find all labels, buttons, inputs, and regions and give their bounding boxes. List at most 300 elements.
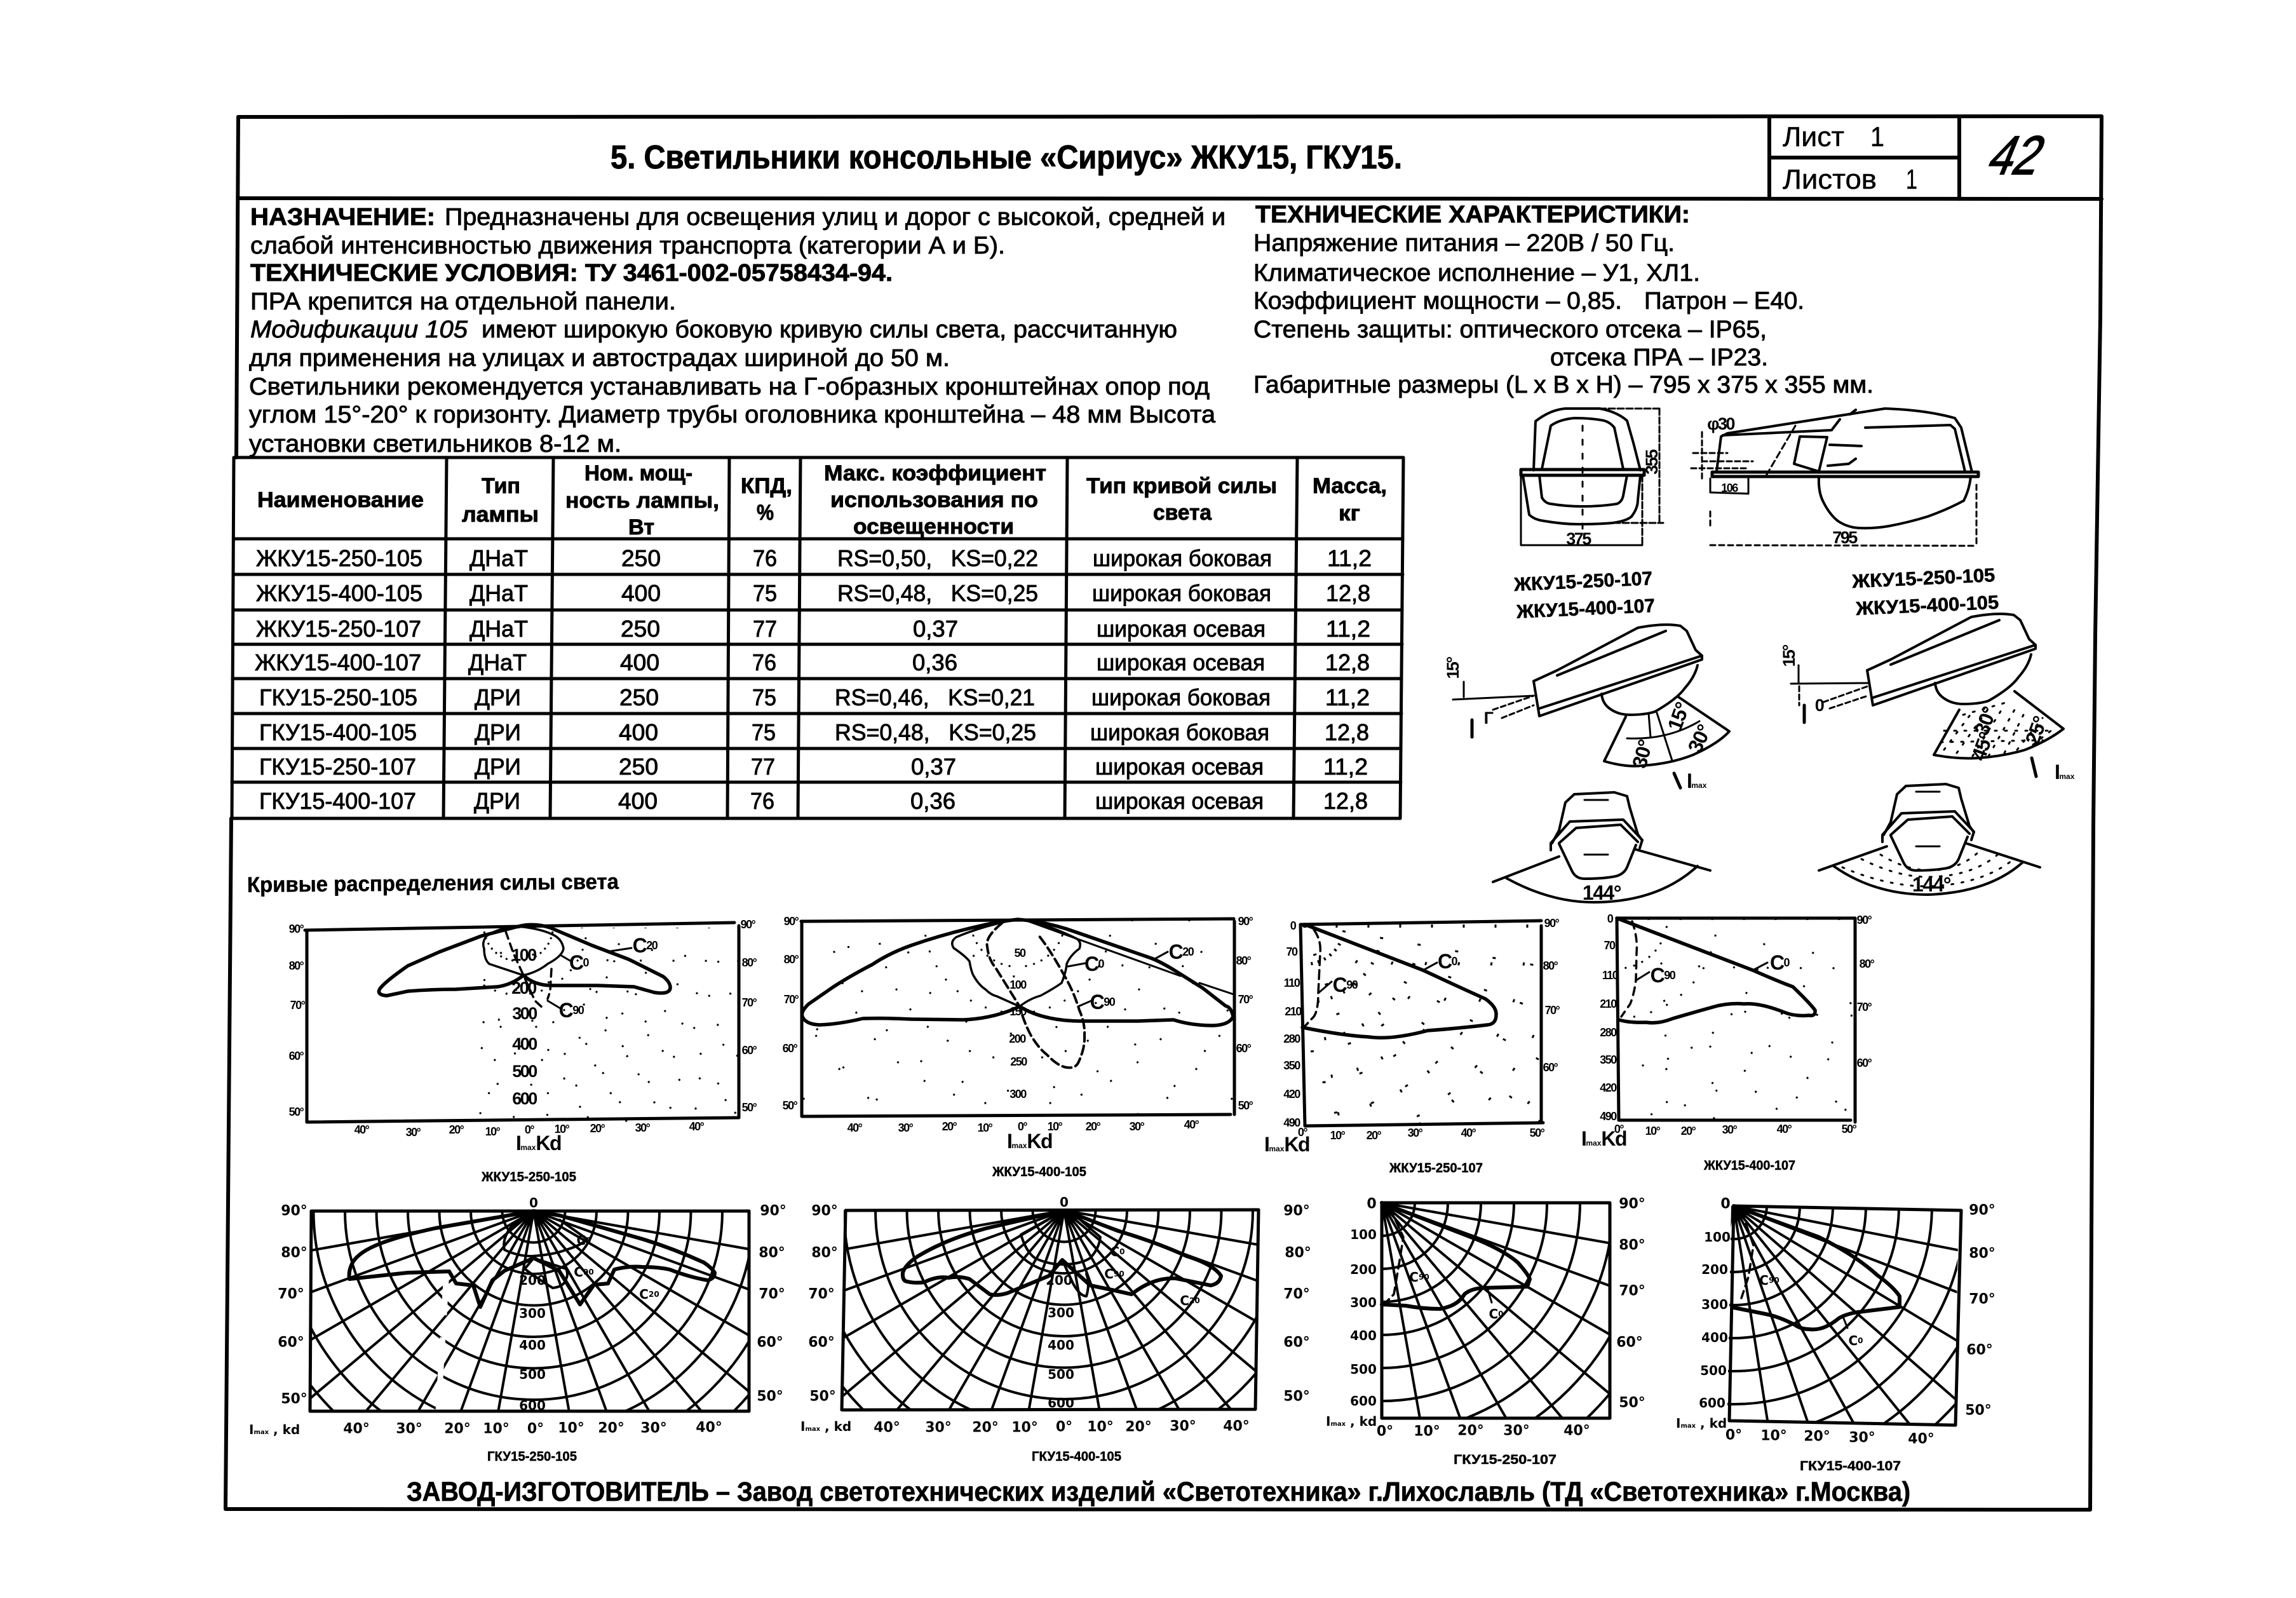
text block: purpose and technical conditions: слабой интенсивностью движения транспорта (категории А и Б). xyxy=(250,233,1005,259)
angle labels: 40° xyxy=(343,1421,370,1437)
angle labels: 90° xyxy=(1544,917,1560,930)
side view drawing of luminaire: 795 xyxy=(1832,528,1858,547)
table row 8: ДРИ xyxy=(474,788,520,814)
caption: ЖКУ15-250-107 xyxy=(1389,1161,1483,1175)
angle labels: 0° xyxy=(1056,1419,1072,1435)
side view drawing of luminaire: 106 xyxy=(1721,482,1738,494)
curve C90 xyxy=(1621,921,1637,1017)
intensity scale: 0 xyxy=(1060,1195,1069,1210)
table row 8: 12,8 xyxy=(1323,788,1368,814)
table row 3: ЖКУ15-250-107 xyxy=(256,616,421,642)
footer: manufacturer: ЗАВОД-ИЗГОТОВИТЕЛЬ – Завод светотехнических изделий «Светотехника» г.Лихославль (ТД «Светотехника» г.Москва) xyxy=(407,1477,1910,1507)
curve labels: C20 xyxy=(1169,940,1194,963)
angle labels: 20° xyxy=(1804,1428,1830,1445)
angle labels: 70° xyxy=(742,996,757,1009)
curve C20 xyxy=(903,1210,1221,1295)
intensity scale: 200 xyxy=(519,1273,546,1288)
front luminaire with 144 degree sector (107) xyxy=(1493,792,1710,904)
curve labels xyxy=(1409,1270,1504,1322)
axis unit: Imax , kd xyxy=(249,1422,300,1437)
angle labels: 50° xyxy=(1965,1403,1992,1418)
caption: ГКУ15-400-107 xyxy=(1800,1459,1901,1473)
angle labels: 10° xyxy=(1414,1423,1440,1440)
angle labels xyxy=(289,918,757,1139)
angle labels: 50° xyxy=(809,1389,836,1404)
captions: 107 modification: ЖКУ15-400-107 xyxy=(1515,595,1656,623)
angle labels: 10° xyxy=(1048,1120,1063,1133)
table row 5: RS=0,46, KS=0,21 xyxy=(835,684,1035,710)
angle labels: 50° xyxy=(1283,1389,1310,1404)
curve labels: C0 xyxy=(1770,951,1790,974)
angle labels: 70° xyxy=(1545,1004,1560,1017)
table row 5 xyxy=(259,684,1370,710)
table row 7: 11,2 xyxy=(1323,754,1368,780)
intensity scale: 500 xyxy=(512,1062,537,1081)
angle labels: 20° xyxy=(1681,1125,1696,1137)
angle labels: 90° xyxy=(289,923,304,935)
table row 2: 400 xyxy=(621,580,661,606)
intensity scale: 300 xyxy=(1701,1297,1728,1312)
captions: 105 modification: ЖКУ15-400-105 xyxy=(1855,592,1999,620)
front luminaire with 144 degree sector (107): 144° xyxy=(1583,881,1621,904)
angle labels: 30° xyxy=(898,1121,914,1134)
intensity scale: 400 xyxy=(519,1337,546,1353)
handwritten page number: 42 xyxy=(1980,125,2054,186)
caption: ЖКУ15-400-107 xyxy=(1703,1158,1795,1173)
angle labels: 0° xyxy=(1725,1427,1742,1444)
table row 6: RS=0,48, KS=0,25 xyxy=(835,719,1036,745)
table row 8 xyxy=(259,788,1368,814)
intensity scale: 500 xyxy=(519,1367,546,1382)
angle labels: 60° xyxy=(808,1334,835,1351)
angle labels: 40° xyxy=(1908,1431,1935,1447)
heading: light distribution curves: Кривые распределения силы света xyxy=(247,870,619,897)
table row 1 xyxy=(256,545,1372,571)
table header: ность лампы, xyxy=(565,489,719,513)
front luminaire with 144 degree speckled sector (105) xyxy=(1819,784,2040,896)
angle labels: 0° xyxy=(1614,1123,1624,1135)
angle labels: 70° xyxy=(1283,1286,1310,1303)
chart: ГКУ15-400-107 xyxy=(1677,1197,1994,1470)
angle labels: 20° xyxy=(1457,1423,1484,1439)
angle labels: 90° xyxy=(1619,1196,1645,1212)
table row 7: широкая осевая xyxy=(1095,754,1264,780)
curve C0 xyxy=(504,1211,587,1256)
tilted luminaire with 107 light sector: 15° xyxy=(1663,700,1694,734)
angle labels: 20° xyxy=(598,1421,625,1436)
angle labels: 20° xyxy=(449,1123,464,1136)
angle labels: 40° xyxy=(1223,1418,1250,1435)
curve labels xyxy=(1759,1273,1863,1348)
intensity scale: 500 xyxy=(1048,1367,1074,1382)
angle labels: 90° xyxy=(1238,915,1253,928)
angle labels xyxy=(1614,914,1875,1137)
curve C0 xyxy=(1302,924,1496,1038)
angle labels: 50° xyxy=(1238,1099,1253,1112)
table row 4: ДНаТ xyxy=(468,649,527,675)
angle labels: 80° xyxy=(784,953,799,966)
tilted luminaire with 105 speckled light sector: 45° xyxy=(1967,729,1998,764)
angle labels: 20° xyxy=(1125,1419,1152,1435)
axis unit: Imax , kd xyxy=(800,1419,851,1434)
table row 8: 400 xyxy=(618,788,658,814)
angle labels: 80° xyxy=(281,1245,307,1261)
curve C20 xyxy=(802,919,1233,1026)
curve C0 xyxy=(952,919,1080,1006)
angle labels: 60° xyxy=(1966,1342,1993,1358)
table row 6: ГКУ15-400-105 xyxy=(259,719,417,745)
text block: technical characteristics: ТЕХНИЧЕСКИЕ ХАРАКТЕРИСТИКИ: xyxy=(1255,201,1690,228)
angle labels: 20° xyxy=(942,1120,957,1133)
text block: purpose and technical conditions: ПРА крепится на отдельной панели. xyxy=(250,288,676,315)
axis unit: Imax , kd xyxy=(1326,1414,1377,1429)
table row 5: 75 xyxy=(752,684,776,710)
specification table xyxy=(232,457,1403,818)
curve labels: C0 xyxy=(576,1233,591,1248)
angle labels: 80° xyxy=(1860,958,1875,970)
intensity scale: 250 xyxy=(1010,1055,1027,1068)
angle labels: 90° xyxy=(741,918,756,931)
curve C90 xyxy=(1384,1207,1403,1304)
table row 6: 12,8 xyxy=(1325,719,1369,745)
angle labels: 30° xyxy=(925,1419,952,1436)
angle labels: 60° xyxy=(1857,1057,1872,1069)
curve C0 xyxy=(1734,1206,1900,1329)
angle labels: 80° xyxy=(811,1245,838,1261)
angle labels: 10° xyxy=(483,1421,510,1437)
intensity scale: 200 xyxy=(511,978,536,998)
intensity scale: 300 xyxy=(519,1306,546,1321)
tilted luminaire with 105 speckled light sector xyxy=(1779,614,2075,783)
table row 3 xyxy=(256,616,1370,642)
text block: purpose and technical conditions: Светильники рекомендуется устанавливать на Г-образных кронштейнах опор под xyxy=(249,374,1210,400)
intensity scale xyxy=(1009,947,1027,1100)
angle labels: 80° xyxy=(759,1245,785,1261)
angle labels: 30° xyxy=(1722,1123,1738,1136)
angle labels: 90° xyxy=(1283,1203,1310,1219)
intensity scale xyxy=(1600,912,1619,1123)
table header: Вт xyxy=(628,515,654,539)
angle labels xyxy=(808,1203,1311,1436)
intensity scale: 300 xyxy=(1048,1305,1074,1320)
table row 8: широкая осевая xyxy=(1095,788,1264,814)
intensity scale: 200 xyxy=(1701,1262,1728,1277)
captions: 107 modification: ЖКУ15-250-107 xyxy=(1513,568,1653,595)
text block: purpose and technical conditions: углом 15°-20° к горизонту. Диаметр трубы оголовника кронштейна – 48 мм Высота xyxy=(249,402,1216,428)
curve labels xyxy=(1636,951,1790,987)
intensity scale: 600 xyxy=(512,1089,537,1108)
chart: ГКУ15-250-107 xyxy=(1327,1197,1644,1464)
angle labels: 0° xyxy=(1018,1120,1027,1133)
table row 7: 250 xyxy=(619,754,658,780)
text block: purpose and technical conditions: ТЕХНИЧЕСКИЕ УСЛОВИЯ: ТУ 3461-002-05758434-94. xyxy=(250,260,893,287)
angle labels: 80° xyxy=(1236,954,1252,967)
curve labels xyxy=(1318,950,1458,996)
table header: КПД, xyxy=(741,474,792,498)
table row 2: ЖКУ15-400-105 xyxy=(256,580,422,606)
angle labels: 40° xyxy=(1777,1123,1792,1135)
angle labels: 60° xyxy=(1616,1334,1643,1351)
angle labels: 60° xyxy=(289,1050,304,1062)
angle labels xyxy=(1725,1202,1995,1447)
text block: technical characteristics: Патрон – Е40. xyxy=(1644,288,1804,315)
table row 8: 0,36 xyxy=(910,788,956,814)
angle labels: 0° xyxy=(1377,1423,1393,1440)
table row 1: 11,2 xyxy=(1327,545,1372,571)
angle labels: 50° xyxy=(742,1101,757,1114)
table row 2: ДНаТ xyxy=(469,580,528,606)
captions: 105 modification xyxy=(1851,565,1999,620)
text block: technical characteristics: Габаритные размеры (L x B x H) – 795 x 375 x 355 мм. xyxy=(1253,372,1874,398)
angle labels: 0° xyxy=(1298,1126,1307,1139)
intensity scale: 300 xyxy=(512,1004,537,1023)
front view drawing of luminaire: 355 xyxy=(1642,449,1661,475)
intensity scale: 50 xyxy=(1014,947,1026,959)
intensity scale: 600 xyxy=(1699,1395,1725,1411)
curve labels: C20 xyxy=(639,1287,659,1302)
table row 4: 76 xyxy=(752,649,776,675)
sheet number box xyxy=(1783,121,1917,195)
table row 4: широкая осевая xyxy=(1097,649,1265,675)
intensity scale: 200 xyxy=(1046,1273,1072,1288)
angle labels: 40° xyxy=(696,1419,722,1436)
table row 1: широкая боковая xyxy=(1093,545,1272,571)
intensity scale xyxy=(519,1195,546,1413)
table row 7: ГКУ15-250-107 xyxy=(259,754,416,780)
angle labels: 80° xyxy=(289,959,304,972)
intensity scale: 300 xyxy=(1350,1295,1377,1310)
intensity scale: 100 xyxy=(1350,1227,1377,1242)
angle labels: 50° xyxy=(783,1099,798,1112)
table row 5: 250 xyxy=(619,684,659,710)
intensity scale: 400 xyxy=(1048,1337,1074,1353)
angle labels: 90° xyxy=(784,915,799,928)
intensity scale: 150 xyxy=(1010,1005,1027,1018)
text block: technical characteristics: Коэффициент мощности – 0,85. xyxy=(1253,288,1622,315)
angle labels: 20° xyxy=(972,1419,999,1436)
angle labels: 30° xyxy=(406,1126,421,1139)
angle labels: 40° xyxy=(1184,1118,1199,1131)
side view drawing of luminaire: φ30 xyxy=(1707,414,1734,433)
captions: 107 modification xyxy=(1513,568,1656,623)
caption: ЖКУ15-250-105 xyxy=(481,1170,576,1184)
angle labels: 90° xyxy=(1969,1202,1995,1219)
intensity scale: 400 xyxy=(1701,1330,1728,1345)
intensity scale: 500 xyxy=(1350,1362,1377,1377)
angle labels: 70° xyxy=(784,993,799,1006)
table row 2: широкая боковая xyxy=(1092,580,1271,606)
angle labels: 70° xyxy=(759,1286,785,1303)
intensity scale: 490 xyxy=(1600,1110,1617,1123)
angle labels: 40° xyxy=(1563,1423,1590,1439)
front luminaire with 144 degree speckled sector (105): 144° xyxy=(1912,873,1951,896)
angle labels: 30° xyxy=(1408,1127,1423,1139)
angle labels: 70° xyxy=(1969,1291,1995,1308)
angle labels: 30° xyxy=(640,1421,667,1436)
table row 4: 0,36 xyxy=(912,649,957,675)
table row 3: ДНаТ xyxy=(469,616,528,642)
tilted luminaire with 105 speckled light sector: Imax xyxy=(2055,761,2075,783)
sheet number box: 1 xyxy=(1906,164,1917,195)
angle labels: 80° xyxy=(1285,1245,1311,1261)
curve labels: C20 xyxy=(633,934,658,957)
angle labels: 10° xyxy=(485,1125,501,1138)
angle labels: 70° xyxy=(808,1286,835,1303)
curve labels: C90 xyxy=(1651,964,1676,987)
table row 6: широкая боковая xyxy=(1090,719,1269,745)
curve labels: C90 xyxy=(574,1264,594,1280)
table header xyxy=(257,461,1387,539)
table row 3: широкая осевая xyxy=(1097,616,1266,642)
tilted luminaire with 105 speckled light sector: 0 xyxy=(1815,696,1824,715)
table row 7: 77 xyxy=(751,754,775,780)
angle labels: 10° xyxy=(558,1421,584,1436)
title: 5. Светильники консольные «Сириус» ЖКУ15, ГКУ15. xyxy=(611,139,1402,176)
chart: ГКУ15-250-105 xyxy=(250,1197,785,1461)
curve labels xyxy=(548,934,658,1022)
angle labels: 30° xyxy=(1503,1423,1530,1439)
intensity scale: 0 xyxy=(1367,1196,1377,1212)
table header: использования по xyxy=(830,488,1038,512)
table row 4: ЖКУ15-400-107 xyxy=(255,649,421,675)
curve C0 xyxy=(483,926,564,975)
table row 6: 400 xyxy=(619,719,658,745)
curve C90 xyxy=(987,923,1084,1067)
text block: purpose and technical conditions: для применения на улицах и автострадах шириной до 50 м. xyxy=(249,345,950,372)
intensity scale: 0 xyxy=(1720,1196,1731,1212)
angle labels: 10° xyxy=(1087,1419,1114,1435)
angle labels xyxy=(1298,917,1560,1142)
curve labels: C20 xyxy=(1180,1293,1200,1308)
intensity scale: 70 xyxy=(1286,945,1298,958)
side view drawing of luminaire xyxy=(1691,409,1978,547)
curve labels: C0 xyxy=(569,951,590,974)
curve C90 xyxy=(525,1258,567,1288)
curve labels: C90 xyxy=(1104,1266,1124,1282)
table row 3: 250 xyxy=(621,616,660,642)
table row 5: 11,2 xyxy=(1325,684,1370,710)
axis unit: Imax , kd xyxy=(1676,1416,1727,1431)
chart: ЖКУ15-250-105 xyxy=(289,920,757,1182)
table row 8: ГКУ15-400-107 xyxy=(259,788,416,814)
intensity scale: 100 xyxy=(1010,978,1027,991)
tilted luminaire with 107 light sector: Г xyxy=(1484,708,1494,728)
angle labels: 80° xyxy=(1619,1238,1645,1253)
angle labels: 10° xyxy=(1645,1125,1661,1137)
table row 5: ДРИ xyxy=(475,684,521,710)
angle labels: 60° xyxy=(1283,1334,1310,1351)
text block: purpose and technical conditions: Предназначены для освещения улиц и дорог с высокой, средней и xyxy=(445,204,1226,231)
text block: purpose and technical conditions: НАЗНАЧЕНИЕ: xyxy=(250,204,435,231)
text block: technical characteristics: Степень защиты: оптического отсека – IP65, xyxy=(1253,316,1767,343)
table row 4 xyxy=(255,649,1370,675)
intensity scale: 350 xyxy=(1283,1059,1300,1072)
angle labels: 90° xyxy=(760,1203,787,1219)
table row 6: ДРИ xyxy=(475,719,521,745)
angle labels: 30° xyxy=(396,1421,422,1437)
intensity scale: 100 xyxy=(1704,1229,1731,1245)
tilted luminaire with 107 light sector: 15° xyxy=(1443,657,1462,679)
table row 3: 0,37 xyxy=(913,616,958,642)
text block: technical characteristics: Напряжение питания – 220В / 50 Гц. xyxy=(1253,230,1675,257)
intensity scale: 110 xyxy=(1284,977,1300,989)
table row 1: 76 xyxy=(753,545,777,571)
curve C90 xyxy=(1305,930,1320,1026)
table row 2: 75 xyxy=(753,580,777,606)
curve labels xyxy=(1104,1244,1200,1308)
intensity scale: 200 xyxy=(1350,1262,1377,1277)
angle labels: 30° xyxy=(1849,1430,1875,1446)
table row 4: 12,8 xyxy=(1325,649,1370,675)
intensity scale xyxy=(1350,1196,1377,1409)
table header: света xyxy=(1153,501,1212,525)
angle labels: 30° xyxy=(1130,1120,1145,1133)
intensity scale: 400 xyxy=(1350,1328,1377,1343)
intensity scale: 210 xyxy=(1285,1005,1302,1018)
intensity scale: 200 xyxy=(1009,1033,1026,1045)
angle labels: 70° xyxy=(278,1286,304,1303)
tilted luminaire with 105 speckled light sector: 15° xyxy=(1779,645,1799,667)
table row 6: 75 xyxy=(752,719,776,745)
chart: ЖКУ15-400-105 xyxy=(783,917,1253,1177)
tilted luminaire with 107 light sector: 30° xyxy=(1683,721,1716,756)
caption: ЖКУ15-400-105 xyxy=(992,1165,1086,1179)
angle labels: 20° xyxy=(1086,1120,1101,1133)
caption: ГКУ15-250-107 xyxy=(1454,1452,1557,1467)
table header: освещенности xyxy=(853,515,1014,539)
table header: Макс. коэффициент xyxy=(824,461,1046,485)
curve C0 xyxy=(1617,918,1815,1023)
angle labels: 20° xyxy=(590,1122,605,1135)
front view drawing of luminaire: 375 xyxy=(1566,529,1591,548)
intensity scale xyxy=(511,945,537,1108)
intensity scale: 420 xyxy=(1600,1081,1617,1094)
angle labels: 10° xyxy=(555,1123,570,1135)
table row 3: 77 xyxy=(753,616,777,642)
angle labels: 60° xyxy=(783,1042,798,1055)
angle labels: 20° xyxy=(1367,1129,1382,1142)
intensity scale: 0 xyxy=(1290,919,1297,932)
angle labels: 50° xyxy=(1842,1123,1857,1135)
intensity scale: 0 xyxy=(1607,912,1614,925)
tilted luminaire with 105 speckled light sector: 30° xyxy=(1970,704,2001,738)
table header: кг xyxy=(1339,501,1360,525)
curve labels xyxy=(574,1233,659,1302)
intensity scale: 210 xyxy=(1600,998,1617,1010)
angle labels: 60° xyxy=(742,1044,757,1057)
intensity scale: 600 xyxy=(1048,1395,1074,1411)
table row 4: 400 xyxy=(620,649,659,675)
table row 1: ДНаТ xyxy=(469,545,528,571)
table header: % xyxy=(757,501,774,525)
table row 1: 250 xyxy=(621,545,661,571)
curve labels: C90 xyxy=(1090,991,1116,1013)
sheet number box: 1 xyxy=(1870,121,1884,152)
curve labels: C0 xyxy=(1848,1333,1863,1348)
text block: purpose and technical conditions: имеют широкую боковую кривую силы света, рассчитанную xyxy=(482,316,1177,343)
angle labels: 40° xyxy=(874,1419,900,1436)
intensity scale: 490 xyxy=(1283,1116,1300,1129)
front view drawing of luminaire xyxy=(1521,409,1663,548)
curve C0 xyxy=(1382,1203,1530,1309)
tilted luminaire with 107 light sector: Imax xyxy=(1687,769,1707,792)
angle labels: 90° xyxy=(1857,914,1872,926)
intensity scale: 100 xyxy=(511,945,536,965)
text block: technical characteristics: отсека ПРА – IP23. xyxy=(1550,344,1768,371)
angle labels: 40° xyxy=(689,1120,705,1133)
curve C90 xyxy=(506,931,551,1007)
intensity scale xyxy=(1046,1195,1074,1411)
